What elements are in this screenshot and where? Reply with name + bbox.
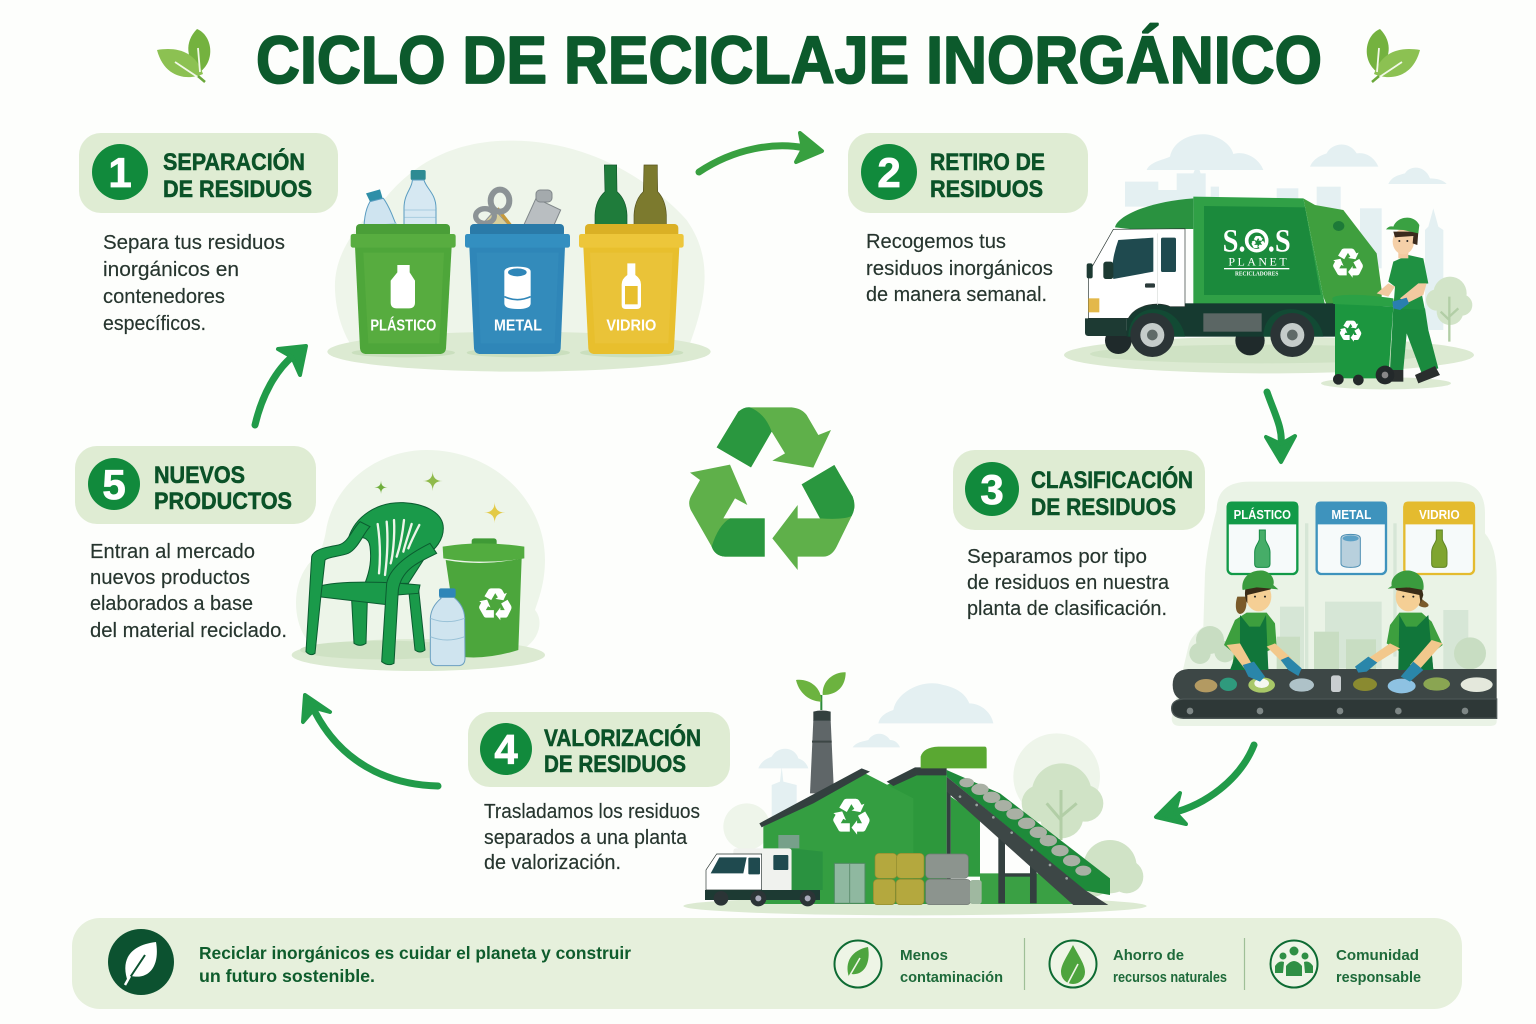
step 2 text: residuos inorgánicos <box>866 257 1053 280</box>
step 1 heading: 1 <box>108 149 132 196</box>
icon: leaf badge <box>108 929 174 995</box>
benefit: resource saving: Ahorro de <box>1113 947 1184 964</box>
benefit: resource saving <box>1050 940 1227 988</box>
buildings <box>759 767 947 904</box>
step 4 heading: VALORIZACIÓN <box>544 724 701 752</box>
truck logo: PLANET <box>1228 255 1287 269</box>
step 5 heading: PRODUCTOS <box>154 488 292 515</box>
blue bin: METAL <box>494 318 542 335</box>
sign: plastic <box>1227 502 1298 574</box>
step 4 heading <box>468 712 730 787</box>
arrow: step 4 to 5 <box>303 695 438 786</box>
sign: metal <box>1316 502 1387 574</box>
chair <box>306 503 443 665</box>
panel: footer banner <box>72 918 1462 1009</box>
step 2 heading: RETIRO DE <box>930 149 1045 176</box>
illustration: sorting conveyor and workers <box>1172 482 1497 726</box>
step 3 heading <box>953 450 1205 530</box>
inclined conveyor with rubble <box>947 770 1110 905</box>
worker left <box>1224 570 1302 682</box>
step 3 text: planta de clasificación. <box>967 597 1167 620</box>
title: CICLO DE RECICLAJE INORGÁNICO <box>256 23 1322 98</box>
step 1 heading <box>79 133 338 213</box>
step 1 text <box>103 231 285 335</box>
sign: glass: VIDRIO <box>1419 508 1460 522</box>
arrow: step 2 to 3 <box>1266 392 1295 462</box>
illustration: garbage truck and worker <box>1064 134 1474 389</box>
step 1 text: inorgánicos en <box>103 258 239 281</box>
truck logo: S.O.S <box>1223 224 1291 260</box>
step 5 text: nuevos productos <box>90 566 250 589</box>
plastic bottle <box>430 588 465 666</box>
benefit: responsible community <box>1270 940 1421 988</box>
footer message: Reciclar inorgánicos es cuidar el planeta y construir <box>199 943 631 963</box>
step 5 heading <box>75 446 316 524</box>
truck logo: RECICLADORES <box>1235 272 1279 278</box>
step 2 heading: RESIDUOS <box>930 176 1043 203</box>
step 3 heading: 3 <box>980 466 1004 513</box>
panel: step 1 separation <box>79 133 711 372</box>
step 4 text: Trasladamos los residuos <box>484 800 700 823</box>
step 3 text: Separamos por tipo <box>967 545 1147 568</box>
conveyor belt <box>1172 669 1497 718</box>
bales <box>873 853 982 905</box>
illustration: recycled chair, bin and bottle <box>292 450 545 671</box>
plastic bottles <box>364 170 436 234</box>
step 4 text: de valorización. <box>484 851 621 874</box>
metal scraps <box>476 190 561 234</box>
icon: left title leaves <box>157 29 210 82</box>
benefit: responsible community: responsable <box>1336 969 1421 986</box>
arrow: step 1 to 2 <box>699 133 822 172</box>
benefit: responsible community: Comunidad <box>1336 947 1419 964</box>
benefit: less pollution: Menos <box>900 947 948 964</box>
worker with bin <box>1321 218 1451 389</box>
yellow bin <box>579 224 684 354</box>
small truck <box>705 848 823 906</box>
benefit: resource saving: recursos naturales <box>1113 969 1227 986</box>
step 1 heading: SEPARACIÓN <box>163 148 305 176</box>
step 3 text: de residuos en nuestra <box>967 571 1170 594</box>
hopper and support structure <box>921 747 1073 904</box>
step 1 text: Separa tus residuos <box>103 231 285 254</box>
waste items on belt <box>1195 675 1493 693</box>
step 5 heading: 5 <box>102 461 126 508</box>
step 2 heading: 2 <box>877 149 901 196</box>
step 3 heading: CLASIFICACIÓN <box>1031 466 1193 494</box>
benefit: less pollution: contaminación <box>900 969 1003 986</box>
sign: plastic: PLÁSTICO <box>1234 507 1291 522</box>
arrow: step 5 to 1 <box>255 346 306 425</box>
truck logo <box>1223 224 1291 278</box>
step 4 heading: 4 <box>494 726 518 773</box>
sparkles <box>374 471 505 523</box>
step 2 heading <box>848 133 1088 213</box>
step 3 heading: DE RESIDUOS <box>1031 494 1176 521</box>
sign: glass <box>1403 502 1475 574</box>
step 4 heading: DE RESIDUOS <box>544 751 686 778</box>
chimney and sprout <box>796 672 846 793</box>
blue bin <box>465 224 570 354</box>
worker right <box>1355 571 1443 682</box>
step 5 text: del material reciclado. <box>90 619 287 642</box>
step 2 text: de manera semanal. <box>866 283 1047 306</box>
step 5 text: elaborados a base <box>90 592 253 615</box>
illustration: three sorting bins <box>327 141 711 372</box>
recycling bin <box>443 538 524 657</box>
step 4 text <box>484 800 700 874</box>
icon: right title leaves <box>1367 29 1420 82</box>
panel: step 2 collection <box>848 133 1474 389</box>
yellow bin: VIDRIO <box>606 318 656 335</box>
panel: step 3 sorting <box>953 450 1497 726</box>
step 5 heading: NUEVOS <box>154 462 245 489</box>
arrow: step 3 to 4 <box>1156 745 1254 824</box>
panel: step 5 new products <box>75 446 545 671</box>
step 1 text: contenedores <box>103 285 225 308</box>
illustration: recycling plant <box>683 672 1147 915</box>
step 2 text <box>866 230 1053 306</box>
step 3 text <box>967 545 1170 620</box>
step 2 text: Recogemos tus <box>866 230 1006 253</box>
glass bottles <box>595 165 666 234</box>
tree <box>1426 277 1472 342</box>
central recycling symbol <box>689 407 854 570</box>
step 5 text: Entran al mercado <box>90 540 255 563</box>
green bin <box>351 224 456 354</box>
truck <box>1085 197 1382 357</box>
sign: metal: METAL <box>1331 508 1372 522</box>
footer message: un futuro sostenible. <box>199 966 375 986</box>
panel: step 4 valorization <box>468 672 1147 915</box>
green bin: PLÁSTICO <box>370 318 436 335</box>
step 1 text: específicos. <box>103 312 206 335</box>
step 4 text: separados a una planta <box>484 826 688 849</box>
step 1 heading: DE RESIDUOS <box>163 176 312 203</box>
footer message <box>199 943 631 986</box>
step 5 text <box>90 540 287 642</box>
trees <box>1022 763 1143 897</box>
benefit: less pollution <box>834 940 1003 988</box>
